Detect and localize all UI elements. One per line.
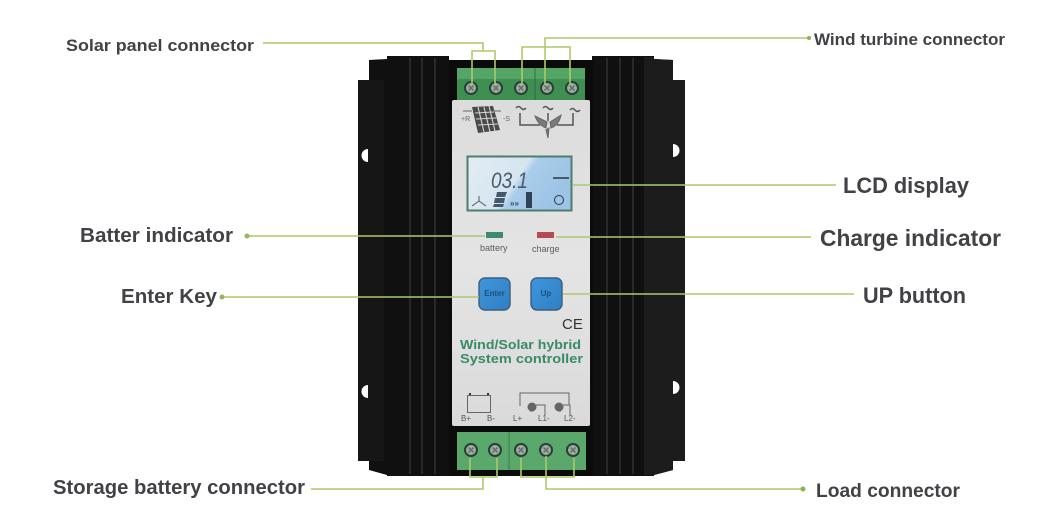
callout: load connector <box>521 456 961 502</box>
screws <box>464 81 579 95</box>
mounting notch left lower <box>362 385 368 398</box>
mounting notch right upper <box>673 144 680 157</box>
product name <box>460 337 583 366</box>
callout: solar panel connector <box>66 36 495 85</box>
Enter button <box>479 278 510 310</box>
charge LED <box>537 232 554 238</box>
Up button: Up <box>541 289 551 298</box>
callout: UP button: UP button <box>863 283 966 308</box>
terminal labels: L1- <box>538 414 550 423</box>
charge LED label: charge <box>532 244 560 254</box>
product name: Wind/Solar hybrid <box>460 337 581 352</box>
left heatsink <box>358 56 449 476</box>
callout: Enter key <box>121 285 479 308</box>
callout: load connector: Load connector <box>816 481 961 502</box>
terminal labels <box>461 414 576 423</box>
LCD arrows: »» <box>510 199 519 208</box>
callout: charge indicator: Charge indicator <box>820 225 1001 251</box>
icon: battery <box>468 393 490 412</box>
terminal labels: L+ <box>513 414 522 423</box>
front label panel <box>452 100 590 426</box>
bottom green terminal block <box>457 432 586 470</box>
center chassis <box>449 60 593 476</box>
callout: solar panel connector: Solar panel connector <box>66 36 254 55</box>
terminal labels: L2- <box>564 414 576 423</box>
callout: battery indicator <box>80 224 485 247</box>
callout: storage battery connector: Storage battery connector <box>53 477 305 499</box>
LCD solar icon <box>493 192 507 207</box>
icon: solar panel <box>461 106 510 133</box>
battery LED <box>486 232 503 238</box>
LCD reading: 03.1 <box>491 168 528 193</box>
right heatsink <box>592 56 685 476</box>
callout: battery indicator: Batter indicator <box>80 224 233 247</box>
callout: wind turbine connector <box>522 30 1005 85</box>
icon: solar panel: -S <box>503 116 510 123</box>
callout: wind turbine connector: Wind turbine connector <box>814 30 1005 49</box>
Enter button: Enter <box>484 289 505 298</box>
callout: LCD display: LCD display <box>843 173 970 198</box>
callout: Enter key: Enter Key <box>121 285 218 308</box>
CE mark: CE <box>562 316 583 333</box>
LCD battery <box>526 192 532 208</box>
LCD screen <box>468 156 572 210</box>
terminal labels: B- <box>487 414 495 423</box>
top green terminal block <box>457 68 585 100</box>
callout: storage battery connector <box>53 458 497 499</box>
LCD wind icon <box>472 196 486 206</box>
Up button <box>531 278 562 310</box>
mounting notch right lower <box>673 381 680 394</box>
terminal labels: B+ <box>461 414 471 423</box>
LCD bulb <box>554 196 564 204</box>
icon: wind turbine wiring <box>516 106 580 138</box>
icon: solar panel: +R <box>461 116 470 123</box>
controller device body <box>358 56 685 476</box>
icon: load wiring <box>520 393 570 415</box>
mounting notch left upper <box>362 149 368 162</box>
battery LED label: battery <box>480 243 508 253</box>
product name: System controller <box>460 351 583 366</box>
